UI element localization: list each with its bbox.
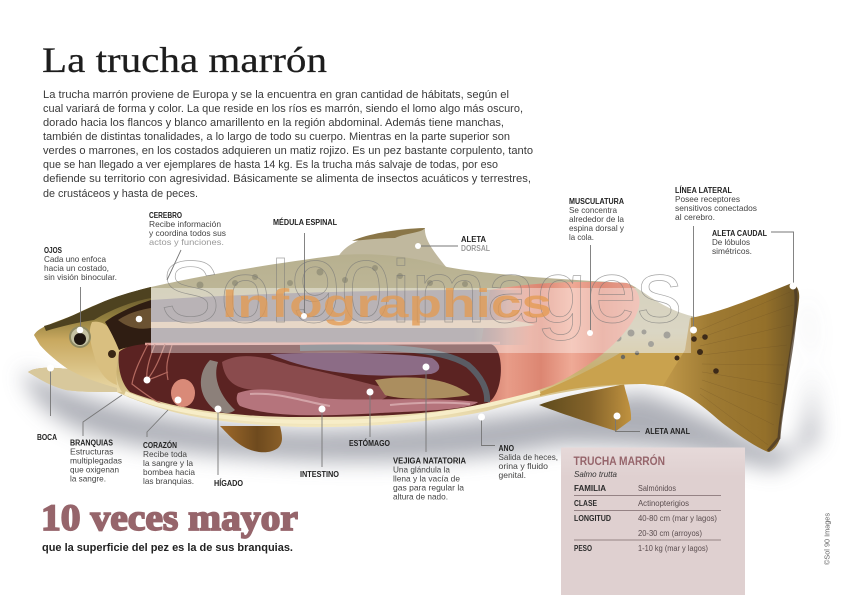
- title: La trucha marrón: [42, 40, 327, 80]
- label: branquias: multiplegadas: [70, 456, 122, 466]
- body silhouette: [28, 254, 712, 427]
- stomach mass: [222, 356, 389, 402]
- label: cerebro: y coordina todos sus: [149, 228, 226, 238]
- callout: 10 veces mayor: que la superficie del pez es la de sus branquias.: [42, 542, 293, 554]
- caudal fin rays: [700, 292, 793, 445]
- swim bladder tube: [300, 347, 487, 402]
- intestine: [237, 389, 478, 415]
- belly highlight: [125, 392, 540, 422]
- label: ojos: hacia un costado,: [44, 263, 109, 273]
- eye: [69, 326, 91, 348]
- label: línea lateral: [675, 186, 757, 222]
- label: ojos: Cada uno enfoca: [44, 254, 106, 264]
- label: ano: genital.: [498, 470, 526, 480]
- watermark: Sol90images outline: Sol90images: [160, 242, 682, 341]
- liver: [201, 360, 235, 413]
- head top dark: [44, 287, 151, 331]
- label: musculatura: la cola.: [569, 232, 594, 242]
- label: aleta dorsal: ALETA: [461, 235, 486, 244]
- lower jaw: [28, 368, 117, 392]
- intro text block: también de distintas tonalidades, a lo largo de todo su cuerpo. Mientras en la parte superior son: [43, 131, 510, 143]
- label: aleta anal: ALETA ANAL: [645, 427, 690, 436]
- watermark band: [151, 288, 691, 353]
- muscle flesh band: [151, 290, 530, 345]
- label: vejiga natatoria: llena y la vacía de: [393, 474, 460, 484]
- intro text block: que se han llegado a ver ejemplares de hasta 14 kg. Es la trucha más salvaje de todas, por eso: [43, 159, 498, 171]
- intro text block: de crustáceos y hasta de peces.: [43, 188, 198, 200]
- row: longitud: LONGITUD: [574, 514, 611, 523]
- label: cerebro: Recibe información: [149, 219, 221, 229]
- label: corazón: bombea hacia: [143, 467, 195, 477]
- label: musculatura: Se concentra: [569, 205, 617, 215]
- row: familia: FAMILIA: [574, 484, 606, 493]
- callout: 10 veces mayor: 10 veces mayor: [41, 498, 298, 539]
- label: aleta caudal: De lóbulos: [712, 237, 750, 247]
- label: boca: BOCA: [37, 433, 57, 442]
- label: ojos: [44, 246, 117, 282]
- swim bladder ribbed: [270, 353, 439, 376]
- intro text block: [43, 89, 533, 200]
- label: vejiga natatoria: altura de nado.: [393, 492, 448, 502]
- label: musculatura: alrededor de la: [569, 214, 624, 224]
- heart: [171, 379, 195, 407]
- label: línea lateral: LÍNEA LATERAL: [675, 186, 732, 195]
- label: cerebro: actos y funciones.: [149, 237, 224, 247]
- label: vejiga natatoria: gas para regular la: [393, 482, 464, 492]
- head: [28, 287, 151, 392]
- label: médula espinal: MÉDULA ESPINAL: [273, 218, 337, 227]
- label: corazón: CORAZÓN: [143, 441, 177, 450]
- label: corazón: las branquias.: [143, 476, 194, 486]
- row: longitud: 20-30 cm (arroyos): [638, 529, 702, 538]
- lower peduncle gold: [540, 353, 712, 396]
- label: cerebro: [149, 211, 226, 247]
- dorsal fin tip shading: [352, 228, 425, 241]
- row: clase: Actinopterigios: [638, 499, 689, 508]
- row: peso: [574, 544, 708, 553]
- label: estómago: ESTÓMAGO: [349, 439, 390, 448]
- marker dots: [47, 243, 796, 420]
- row: longitud: [574, 514, 717, 538]
- label: musculatura: [569, 197, 625, 242]
- beige organ: [375, 377, 470, 399]
- gill spot: [108, 350, 116, 358]
- callout: 10 veces mayor: [41, 498, 298, 554]
- trout illustration: [28, 228, 799, 452]
- label: línea lateral: al cerebro.: [675, 212, 715, 222]
- row: clase: CLASE: [574, 499, 598, 508]
- row: peso: PESO: [574, 544, 592, 553]
- label: vejiga natatoria: [393, 456, 466, 502]
- body back spots: [196, 265, 468, 288]
- gills: [132, 344, 178, 410]
- intro text block: cual variará de forma y color. La que reside en los ríos es marrón, siendo el lomo algo más oscuro,: [43, 103, 523, 115]
- dorsal fin: [338, 228, 447, 268]
- label: musculatura: MUSCULATURA: [569, 197, 624, 206]
- cut-away muscle: [470, 282, 640, 408]
- label: musculatura: espina dorsal y: [569, 223, 625, 233]
- label: aleta caudal: [712, 229, 767, 256]
- anal fin: [539, 384, 631, 431]
- row: familia: Salmónidos: [638, 484, 676, 493]
- label: branquias: [70, 438, 122, 484]
- intro text block: verdes o marrones, en los costados adquieren un matiz rojizo. Es un pez bastante corpulento, tanto: [43, 145, 533, 157]
- label: intestino: INTESTINO: [300, 470, 339, 479]
- gill cover pale: [90, 322, 120, 385]
- label: branquias: la sangre.: [70, 474, 106, 484]
- row: peso: 1-10 kg (mar y lagos): [638, 544, 708, 553]
- label: aleta dorsal: DORSAL: [461, 244, 490, 253]
- label: corazón: Recibe toda: [143, 449, 187, 459]
- brain: [118, 308, 151, 329]
- label: ano: Salida de heces,: [498, 452, 558, 462]
- panel: species data: [561, 448, 745, 595]
- abdominal cavity: [119, 344, 501, 417]
- label: ojos: sin visión binocular.: [44, 272, 117, 282]
- row: clase: [574, 499, 689, 508]
- label: ano: ANO: [498, 444, 514, 453]
- row: longitud: 40-80 cm (mar y lagos): [638, 514, 717, 523]
- label: hígado: HÍGADO: [214, 479, 243, 488]
- label: línea lateral: Posee receptores: [675, 194, 740, 204]
- label: vejiga natatoria: Una glándula la: [393, 464, 450, 474]
- label: línea lateral: sensitivos conectados: [675, 203, 757, 213]
- label: vejiga natatoria: VEJIGA NATATORIA: [393, 456, 466, 466]
- intro text block: defiende su territorio con agresividad. Básicamente se alimenta de insectos acuáticos y terrestres,: [43, 173, 531, 185]
- scientific name: Salmo trutta: [574, 469, 617, 479]
- label: branquias: BRANQUIAS: [70, 438, 114, 448]
- credit: ©Sol 90 Images: [824, 512, 832, 565]
- caudal fin dark edge: [768, 288, 796, 451]
- pelvic fin: [220, 426, 282, 452]
- intro text block: La trucha marrón proviene de Europa y se la encuentra en gran cantidad de hábitats, según el: [43, 89, 509, 101]
- brain cavity: [105, 300, 151, 350]
- label: cerebro: CEREBRO: [149, 211, 182, 220]
- cavity upper lining: [145, 343, 500, 344]
- label: aleta caudal: simétricos.: [712, 246, 752, 256]
- label: ano: orina y fluido: [498, 461, 548, 471]
- tail dark spots: [674, 334, 719, 374]
- label: aleta caudal: ALETA CAUDAL: [712, 229, 767, 238]
- label: branquias: que oxigenan: [70, 464, 119, 474]
- label: ojos: OJOS: [44, 246, 63, 255]
- intro text block: dorado hacia los flancos y blanco amarillento en la región abdominal. Además tiene manchas,: [43, 117, 504, 129]
- watermark: Infographics: Infographics: [222, 282, 552, 326]
- label: corazón: [143, 441, 195, 486]
- caudal fin: [663, 283, 799, 452]
- label: ano: [498, 444, 558, 480]
- spine: [151, 320, 535, 328]
- leader lines: [50, 226, 794, 475]
- label: branquias: Estructuras: [70, 446, 114, 456]
- panel heading: TRUCHA MARRÓN: [574, 455, 665, 468]
- label: corazón: la sangre y la: [143, 458, 193, 468]
- intestine highlight: [250, 394, 470, 406]
- row: familia: [574, 484, 676, 493]
- label: aleta dorsal: [461, 235, 490, 253]
- fish shadow: [22, 295, 818, 470]
- tail peduncle spots: [614, 330, 670, 359]
